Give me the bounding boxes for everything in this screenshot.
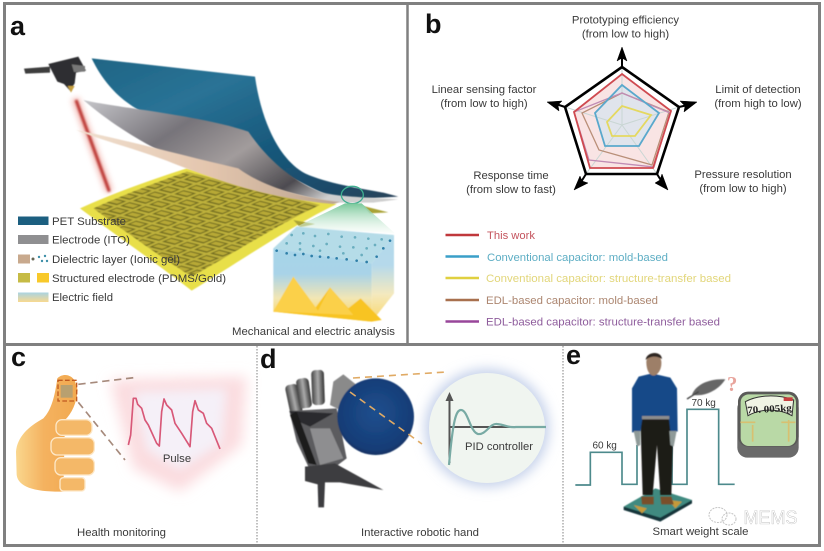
- axis label right: (from high to low): [714, 98, 802, 110]
- glow: PID circle: [425, 369, 549, 487]
- swatch: structured electrode: [18, 273, 49, 282]
- PID label: PID controller: [465, 441, 533, 453]
- stand: [305, 463, 383, 507]
- panel b: radar chart: [425, 9, 802, 328]
- legend: this work: [446, 230, 535, 242]
- legend b: [446, 230, 731, 328]
- legend: EDL transfer: EDL-based capacitor: structure-transfer based: [486, 316, 720, 328]
- laser beam: [75, 98, 109, 192]
- caption a: Mechanical and electric analysis: [232, 326, 395, 338]
- ITO electrode sheet: [83, 100, 398, 203]
- PID arrow head: [446, 392, 454, 401]
- 70 kg label: 70 kg: [691, 398, 716, 409]
- zoom cone: [295, 203, 395, 233]
- PID bubble: [429, 373, 546, 483]
- pink pulse cloud: [110, 377, 247, 492]
- PET substrate sheet: [92, 58, 398, 200]
- swatch: dielectric: [18, 254, 48, 264]
- scale reading: 70. 005kg: [747, 403, 792, 416]
- axis label right: Limit of detection: [715, 84, 801, 96]
- pulse waveform: [128, 398, 220, 449]
- pulse background: [133, 388, 227, 470]
- zoom dashes: [78, 377, 137, 460]
- fingers: [285, 370, 357, 415]
- swatch: electrode: [18, 235, 48, 244]
- heading b: b: [425, 9, 442, 39]
- legend a: [18, 216, 226, 304]
- axis label left: (from low to high): [440, 98, 528, 110]
- caption e: Smart weight scale: [652, 526, 748, 538]
- panel a: device illustration: [10, 11, 398, 338]
- structured electrode sheet: [80, 168, 388, 291]
- axis label bottom left: Response time: [473, 170, 549, 182]
- robot hand artwork: [285, 370, 414, 507]
- axis label bottom right: Pressure resolution: [694, 169, 792, 181]
- scale artwork: [575, 353, 799, 522]
- dielectric gel sheet: [76, 130, 340, 204]
- swatch: electric field: [18, 292, 48, 302]
- label: PET substrate: PET Substrate: [52, 216, 126, 228]
- heading d: d: [260, 344, 276, 374]
- label: dielectric: Dielectric layer (Ionic gel): [52, 254, 180, 266]
- swatch: PET substrate: [18, 216, 48, 225]
- watermark: [709, 508, 798, 529]
- heading e: e: [566, 340, 581, 370]
- pulse artwork: [16, 375, 247, 492]
- panel d: robotic hand: [260, 344, 549, 539]
- axis label bottom right: (from low to high): [699, 183, 787, 195]
- palm: [289, 408, 347, 468]
- PID response: [449, 410, 546, 465]
- zoom ring: [341, 186, 363, 204]
- weight trace: [575, 409, 735, 485]
- PID axes: [450, 397, 546, 463]
- illustration artwork: [24, 57, 398, 322]
- sensor patch: [58, 380, 77, 401]
- watermark: MEMS: [744, 508, 798, 529]
- axis label top: Prototyping efficiency: [572, 14, 679, 26]
- radar arrows: [547, 47, 697, 190]
- 60 kg label: 60 kg: [592, 440, 617, 451]
- axis label top: (from low to high): [582, 28, 669, 40]
- ion dots: [275, 239, 391, 263]
- caption d: Interactive robotic hand: [361, 527, 479, 539]
- label: electric field: Electric field: [52, 292, 113, 304]
- inset cube: [273, 227, 394, 322]
- legend: conventional mold: Conventional capacitor: mold-based: [487, 252, 668, 264]
- feather: [687, 379, 725, 399]
- radar plot: [565, 67, 679, 174]
- orange dashed projections: [350, 372, 446, 444]
- scale readout device: [737, 392, 799, 458]
- caption c: Health monitoring: [77, 527, 166, 539]
- hand icon: [16, 375, 94, 492]
- label: electrode: Electrode (ITO): [52, 234, 130, 246]
- print nozzle: [24, 57, 86, 93]
- panel e: smart scale: [566, 340, 799, 538]
- legend: this work: This work: [487, 230, 535, 242]
- person: [632, 353, 678, 504]
- axis label left: Linear sensing factor: [432, 84, 536, 96]
- axis label bottom left: (from slow to fast): [466, 184, 556, 196]
- upper ion dots: [285, 232, 383, 256]
- sphere: [337, 378, 414, 455]
- legend: EDL mold: EDL-based capacitor: mold-based: [486, 295, 658, 307]
- label: structured electrode: Structured electrode (PDMS/Gold): [52, 273, 226, 285]
- panel c: health monitoring: [11, 342, 247, 539]
- pulse label: Pulse: [163, 453, 191, 465]
- platform: [624, 488, 692, 522]
- heading c: c: [11, 342, 26, 372]
- legend: conventional transfer: Conventional capacitor: structure-transfer based: [486, 273, 731, 285]
- question mark: ?: [727, 374, 737, 396]
- heading a: a: [10, 11, 26, 41]
